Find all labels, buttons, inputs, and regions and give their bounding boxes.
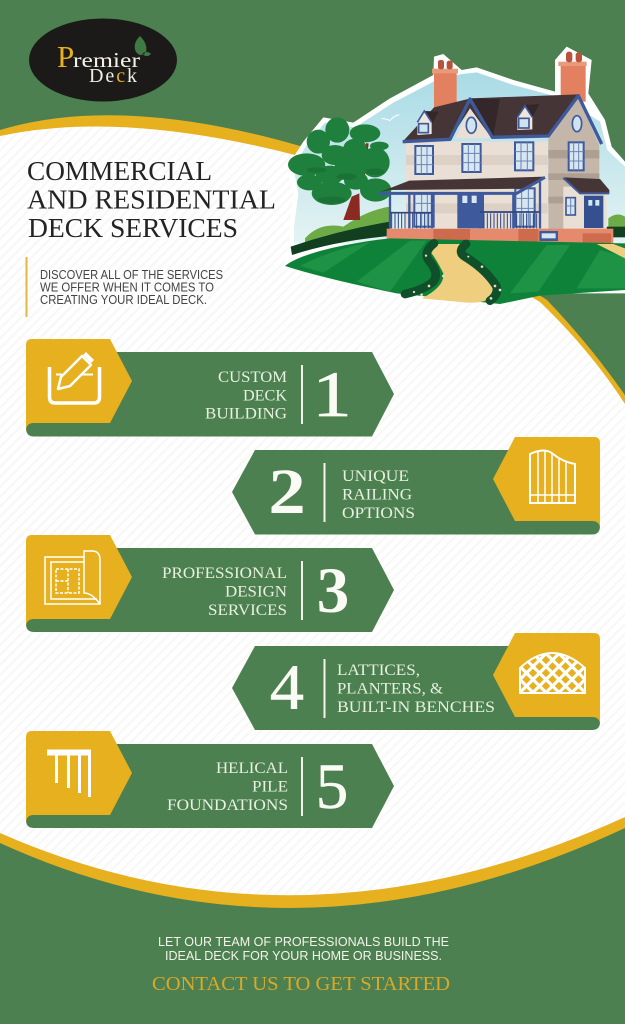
intro text: DISCOVER ALL OF THE SERVICES: [40, 268, 223, 282]
banner 5: [26, 731, 394, 828]
hedge flowers: [413, 254, 501, 300]
bird: [382, 115, 399, 121]
banner 4 divider: [324, 659, 326, 718]
banner 1 label: CUSTOM: [218, 369, 287, 386]
banner 5 label: FOUNDATIONS: [167, 797, 288, 814]
icon: blueprint and pencil: [50, 353, 100, 403]
icon: floor plan: [45, 551, 100, 604]
banner 3 label: DESIGN: [225, 584, 287, 600]
banner 3 label: SERVICES: [208, 602, 287, 619]
banner 2 label: RAILING: [342, 486, 412, 504]
banner 4 label: BUILT-IN BENCHES: [337, 699, 495, 716]
banner 3 gold tab: [26, 535, 132, 627]
logo: Deck: [89, 65, 137, 87]
banner 2 number: 2: [268, 456, 306, 528]
banner 3 number: 3: [317, 555, 349, 627]
walls: [406, 98, 599, 229]
logo wordmark: P: [57, 39, 74, 74]
path hedges: [405, 243, 497, 301]
window bars: [415, 142, 584, 174]
banner 5 label: HELICAL: [216, 760, 288, 777]
footer text: [158, 934, 449, 963]
banner 3 divider: [301, 561, 303, 620]
intro text: WE OFFER WHEN IT COMES TO: [40, 280, 214, 294]
banner 5 divider: [301, 757, 303, 816]
banner 1 label: DECK: [243, 388, 287, 404]
banner 2: [232, 437, 600, 534]
banner 1 divider: [301, 365, 303, 424]
banner 4 label: PLANTERS, &: [337, 680, 444, 698]
banner 2 label: [342, 468, 415, 522]
tree: [288, 117, 391, 220]
banner 4 number: 4: [270, 652, 304, 724]
footer text: LET OUR TEAM OF PROFESSIONALS BUILD THE: [158, 934, 449, 949]
banner 1 label: BUILDING: [205, 406, 287, 422]
banner 3 label: PROFESSIONAL: [162, 565, 287, 582]
roof: [403, 94, 602, 144]
banner 2 label: OPTIONS: [342, 505, 415, 522]
logo: [29, 18, 177, 102]
banner 3 ribbon: [26, 548, 394, 632]
side porch: [563, 177, 609, 229]
banner 2 ribbon: [232, 450, 600, 534]
intro text: CREATING YOUR IDEAL DECK.: [40, 293, 207, 307]
banner 1 ribbon: [26, 352, 394, 436]
icon: helical piles: [47, 750, 91, 797]
banner 3 label: [162, 565, 287, 619]
icon: lattice: [519, 652, 586, 694]
sky: [293, 72, 625, 243]
banner 5 label: PILE: [252, 778, 288, 796]
banner 2 gold tab: [493, 437, 600, 529]
sand path: [422, 244, 625, 303]
banner 4 label: [337, 662, 495, 716]
banner 1 number: 1: [313, 358, 351, 430]
white striped panel: [0, 126, 625, 895]
hedge: [291, 207, 625, 255]
icon: railing: [530, 450, 575, 503]
lawn: [285, 238, 625, 304]
title: COMMERCIAL: [27, 156, 212, 186]
title: AND RESIDENTIAL: [27, 184, 276, 214]
chimneys: [432, 52, 587, 109]
banner 4 label: LATTICES,: [337, 662, 420, 679]
banner 5 gold tab: [26, 731, 132, 823]
banner 4: [232, 633, 600, 730]
gold curved border: [0, 115, 625, 908]
intro text: [40, 268, 223, 307]
title: DECK SERVICES: [28, 213, 238, 243]
porch: [378, 177, 545, 228]
green corner under house: [547, 290, 625, 395]
logo: remier: [73, 48, 140, 72]
banner 1 gold tab: [26, 339, 132, 431]
banner 4 gold tab: [493, 633, 600, 725]
intro accent bar: [26, 257, 28, 317]
banner 3: [26, 535, 394, 632]
title: [27, 156, 276, 243]
banner 1 label: [205, 369, 287, 422]
banner 2 divider: [324, 463, 326, 522]
white outline: [284, 47, 625, 305]
footer text: IDEAL DECK FOR YOUR HOME OR BUSINESS.: [165, 948, 442, 963]
logo leaf: [135, 36, 151, 56]
brick base: [387, 229, 613, 244]
banner 1: [26, 339, 394, 436]
banner 4 ribbon: [232, 646, 600, 730]
banner 5 ribbon: [26, 744, 394, 828]
upper windows: [415, 142, 584, 174]
banner 2 label: UNIQUE: [342, 468, 409, 485]
call to action: CONTACT US TO GET STARTED: [152, 973, 450, 995]
banner 5 number: 5: [316, 751, 348, 823]
house illustration: [284, 47, 625, 305]
banner 5 label: [167, 760, 288, 814]
